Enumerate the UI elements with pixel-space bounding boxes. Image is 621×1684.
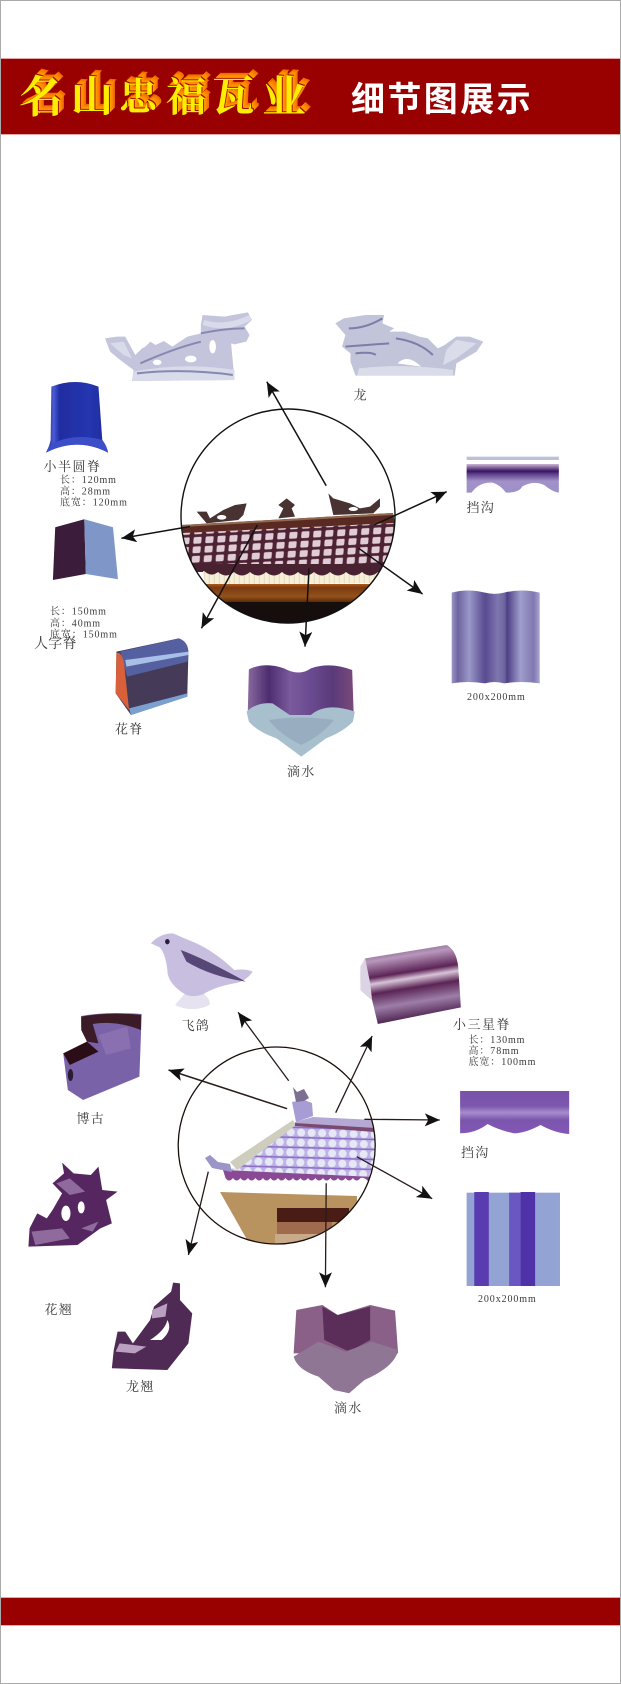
icon: pigeon xyxy=(151,933,253,1009)
label: three-star ridge: 小三星脊 xyxy=(453,1017,511,1032)
logo: company name: 业 xyxy=(262,73,306,122)
icon: three-star ridge tile xyxy=(361,945,461,1024)
logo: company name: 瓦 xyxy=(212,75,254,121)
arrow: to dragon xyxy=(267,382,326,486)
logo: company name: 山 xyxy=(71,75,113,121)
label: herringbone ridge: 人字脊 xyxy=(34,636,77,652)
label: gutter: 挡沟 xyxy=(461,1145,489,1160)
dragon left xyxy=(105,312,252,381)
roof photo in circle xyxy=(182,494,394,622)
header band xyxy=(1,58,620,135)
circle outline xyxy=(178,1047,375,1244)
label: dragon: 龙 xyxy=(354,388,368,402)
icon: flower upturned ornament xyxy=(28,1163,118,1247)
icon: small dragon left xyxy=(197,503,247,523)
label: drip tile: 滴水 xyxy=(334,1400,362,1416)
icon: herringbone ridge tile xyxy=(53,519,118,580)
arrow: to gutter xyxy=(364,1118,440,1121)
label: herringbone ridge xyxy=(34,606,118,652)
arrow: to flower ridge xyxy=(201,525,257,628)
arrow: to drip tile xyxy=(305,568,309,647)
icon: dragon upturned ornament xyxy=(112,1283,192,1370)
arrow: to three-star ridge xyxy=(336,1036,372,1113)
circle outline xyxy=(181,409,395,623)
arrow: to gutter xyxy=(374,492,447,525)
label: herringbone ridge: 高：40mm xyxy=(50,616,101,630)
icon: gutter tile bottom xyxy=(460,1091,569,1134)
icon: small dragon right xyxy=(328,493,380,515)
arrow: to bogu xyxy=(168,1070,287,1109)
label: flower upturned ornament: 花翘 xyxy=(44,1302,73,1317)
panel: eave-corner diagram xyxy=(28,933,569,1416)
arrow: to dragon ornament xyxy=(188,1172,208,1255)
icon: bogu ornament xyxy=(63,1013,142,1100)
icon: small pagoda xyxy=(278,498,295,518)
label: drip tile: 滴水 xyxy=(287,764,315,779)
footer band xyxy=(1,1597,620,1626)
label: dragon upturned ornament: 龙翘 xyxy=(126,1379,154,1394)
panel: ridge-roof diagram xyxy=(34,312,559,779)
label: three-star ridge xyxy=(453,1017,536,1068)
label: gutter: 挡沟 xyxy=(466,500,495,515)
label: wave tile size: 200x200mm xyxy=(478,1294,537,1305)
roof corner photo in circle xyxy=(205,1087,374,1244)
label: three-star ridge: 底宽：100mm xyxy=(468,1055,536,1068)
label: small half-round ridge: 小半圆脊 xyxy=(44,459,102,474)
arrow: to wave tile xyxy=(357,1157,432,1199)
icon: drip tile top xyxy=(247,665,355,757)
arrow: to wave tile xyxy=(359,548,423,594)
icon: wave tile xyxy=(452,590,540,683)
label: small half-round ridge: 长：120mm xyxy=(60,474,117,486)
label: bogu: 博古 xyxy=(76,1111,105,1126)
logo: company name: 名 xyxy=(19,73,63,122)
label: small half-round ridge: 高：28mm xyxy=(60,484,111,498)
logo: company name: 忠 xyxy=(119,77,157,119)
label: three-star ridge: 长：130mm xyxy=(468,1034,525,1046)
label: wave tile size: 200x200mm xyxy=(467,692,526,703)
label: pigeon: 飞鸽 xyxy=(182,1018,210,1033)
logo: company name: 福 xyxy=(166,75,206,120)
icon: drip tile bottom xyxy=(294,1305,398,1393)
label: flower ridge: 花脊 xyxy=(115,722,143,736)
label: three-star ridge: 高：78mm xyxy=(468,1044,519,1057)
arrow: to drip tile xyxy=(324,1183,327,1287)
arrow: to herringbone ridge xyxy=(121,526,190,538)
logo: company name xyxy=(19,68,311,122)
arrow: to pigeon xyxy=(238,1012,289,1081)
label: small half-round ridge: 底宽：120mm xyxy=(60,496,128,508)
title: 细节图展示 xyxy=(351,81,533,119)
label: herringbone ridge: 长：150mm xyxy=(50,606,107,618)
dragon right xyxy=(335,315,483,376)
icon: gutter tile top xyxy=(467,457,559,493)
diagrams xyxy=(28,312,570,1414)
label: herringbone ridge: 底宽：150mm xyxy=(50,628,118,640)
icon: striped wave tile xyxy=(467,1192,560,1286)
icon: flower ridge tile xyxy=(116,638,188,715)
label: small half-round ridge xyxy=(44,459,128,508)
icon: half-round ridge tile xyxy=(46,382,108,453)
